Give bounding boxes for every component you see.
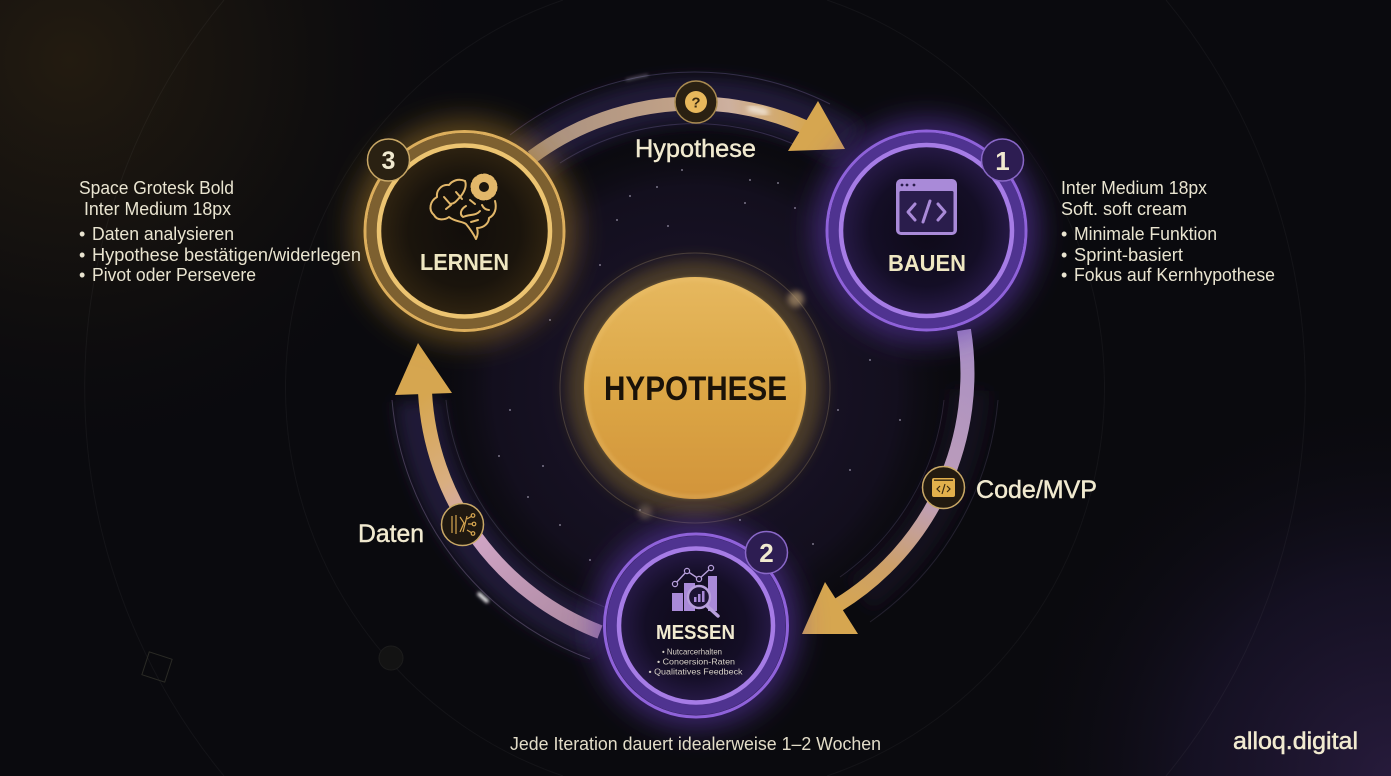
node: messen [593,522,799,728]
center hypothesis circle [560,253,830,523]
text block: lernen details: • [79,224,85,244]
icon: data chip [442,504,484,546]
node bullets: • Nutcarcerhalten [662,646,722,656]
text block: lernen details: • [79,265,85,285]
node bullets: • Conoersion-Raten [657,656,735,666]
footer note: Jede Iteration dauert idealerweise 1–2 Wochen [510,734,881,754]
text block: bauen details: Minimale Funktion [1074,224,1217,244]
text block: bauen details: • [1061,245,1067,265]
node bullets: • Qualitatives Feedbeck [648,666,743,676]
icon: question mark [675,81,717,123]
node: bauen [814,118,1038,342]
arrow: data to learn [395,343,600,632]
center label: HYPOTHESE [604,370,787,408]
brand: alloq.digital [1233,728,1358,755]
label: daten: Daten [358,520,424,548]
icon: brain with gear [430,176,496,239]
text block: lernen details: Pivot oder Persevere [92,265,256,285]
node bullets [648,646,743,676]
badge 2 [746,532,788,574]
node: lernen [352,119,576,343]
icon: question mark: ? [691,94,701,112]
text block: bauen details: Sprint-basiert [1074,245,1183,265]
arrow: hypothesis to build [532,101,845,157]
node label: BAUEN [888,250,966,276]
badge 1: 1 [995,146,1010,176]
node label: MESSEN [656,622,735,644]
text block: bauen details: Soft. soft cream [1061,199,1187,219]
text block: lernen details: Hypothese bestätigen/widerlegen [92,245,361,265]
text block: lernen details: Space Grotesk Bold [79,178,234,198]
badge 2: 2 [759,538,774,568]
text block: bauen details [1061,178,1275,285]
text block: bauen details: • [1061,265,1067,285]
icon: chart with magnifier [672,565,718,616]
text block: bauen details: • [1061,224,1067,244]
badge 1 [982,139,1024,181]
node label: LERNEN [420,249,509,275]
text block: lernen details: Daten analysieren [92,224,234,244]
badge 3 [368,139,410,181]
text block: bauen details: Inter Medium 18px [1061,178,1207,198]
text block: lernen details: • [79,245,85,265]
arrow: code to measure [802,330,967,634]
text block: lernen details: Inter Medium 18px [84,199,231,219]
label: code/mvp: Code/MVP [976,476,1097,504]
text block: lernen details [79,178,361,285]
cycle arc glow and thin orbits [392,72,998,659]
label: hypothese: Hypothese [635,135,756,163]
text block: bauen details: Fokus auf Kernhypothese [1074,265,1275,285]
badge 3: 3 [382,147,395,175]
icon: browser code window [896,179,957,235]
icon: code window small [922,466,964,508]
